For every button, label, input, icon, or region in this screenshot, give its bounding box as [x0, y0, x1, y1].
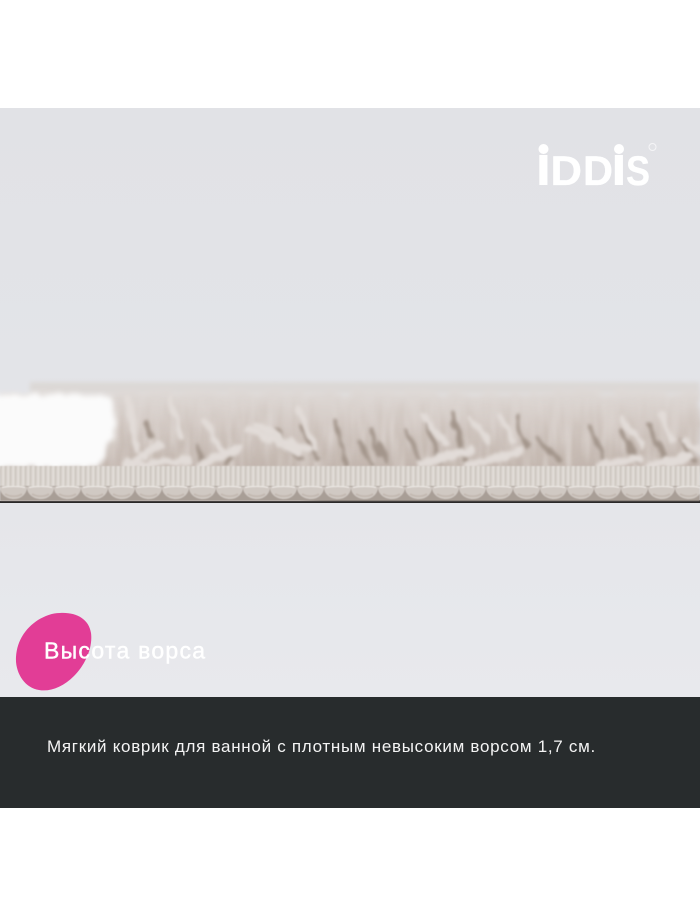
rug [0, 382, 700, 503]
pink blob [16, 613, 91, 690]
IDDIS logo: D [583, 147, 613, 194]
IDDIS logo: i [611, 135, 627, 198]
haze above the pile [30, 382, 700, 394]
IDDIS logo: D [550, 147, 582, 194]
dark caption band [0, 697, 700, 808]
IDDIS logo [538, 143, 656, 186]
fibre streak texture [110, 430, 675, 466]
heading: pile height: Высота ворса [44, 638, 205, 664]
product photo: rug edge close-up [0, 108, 700, 697]
light strands [125, 398, 698, 466]
white tufts on the left [0, 393, 116, 468]
bottom loops [0, 486, 700, 501]
woven binding band [0, 466, 700, 488]
black base line [0, 500, 700, 503]
photo background [0, 108, 700, 697]
shaded gaps between strands [146, 415, 694, 464]
IDDIS logo: i [535, 135, 552, 198]
IDDIS logo: S [626, 147, 650, 194]
pile body [0, 390, 700, 474]
tufts falling over the band [0, 464, 700, 470]
caption text: Мягкий коврик для ванной с плотным невысоким ворсом 1,7 см. [47, 737, 596, 756]
